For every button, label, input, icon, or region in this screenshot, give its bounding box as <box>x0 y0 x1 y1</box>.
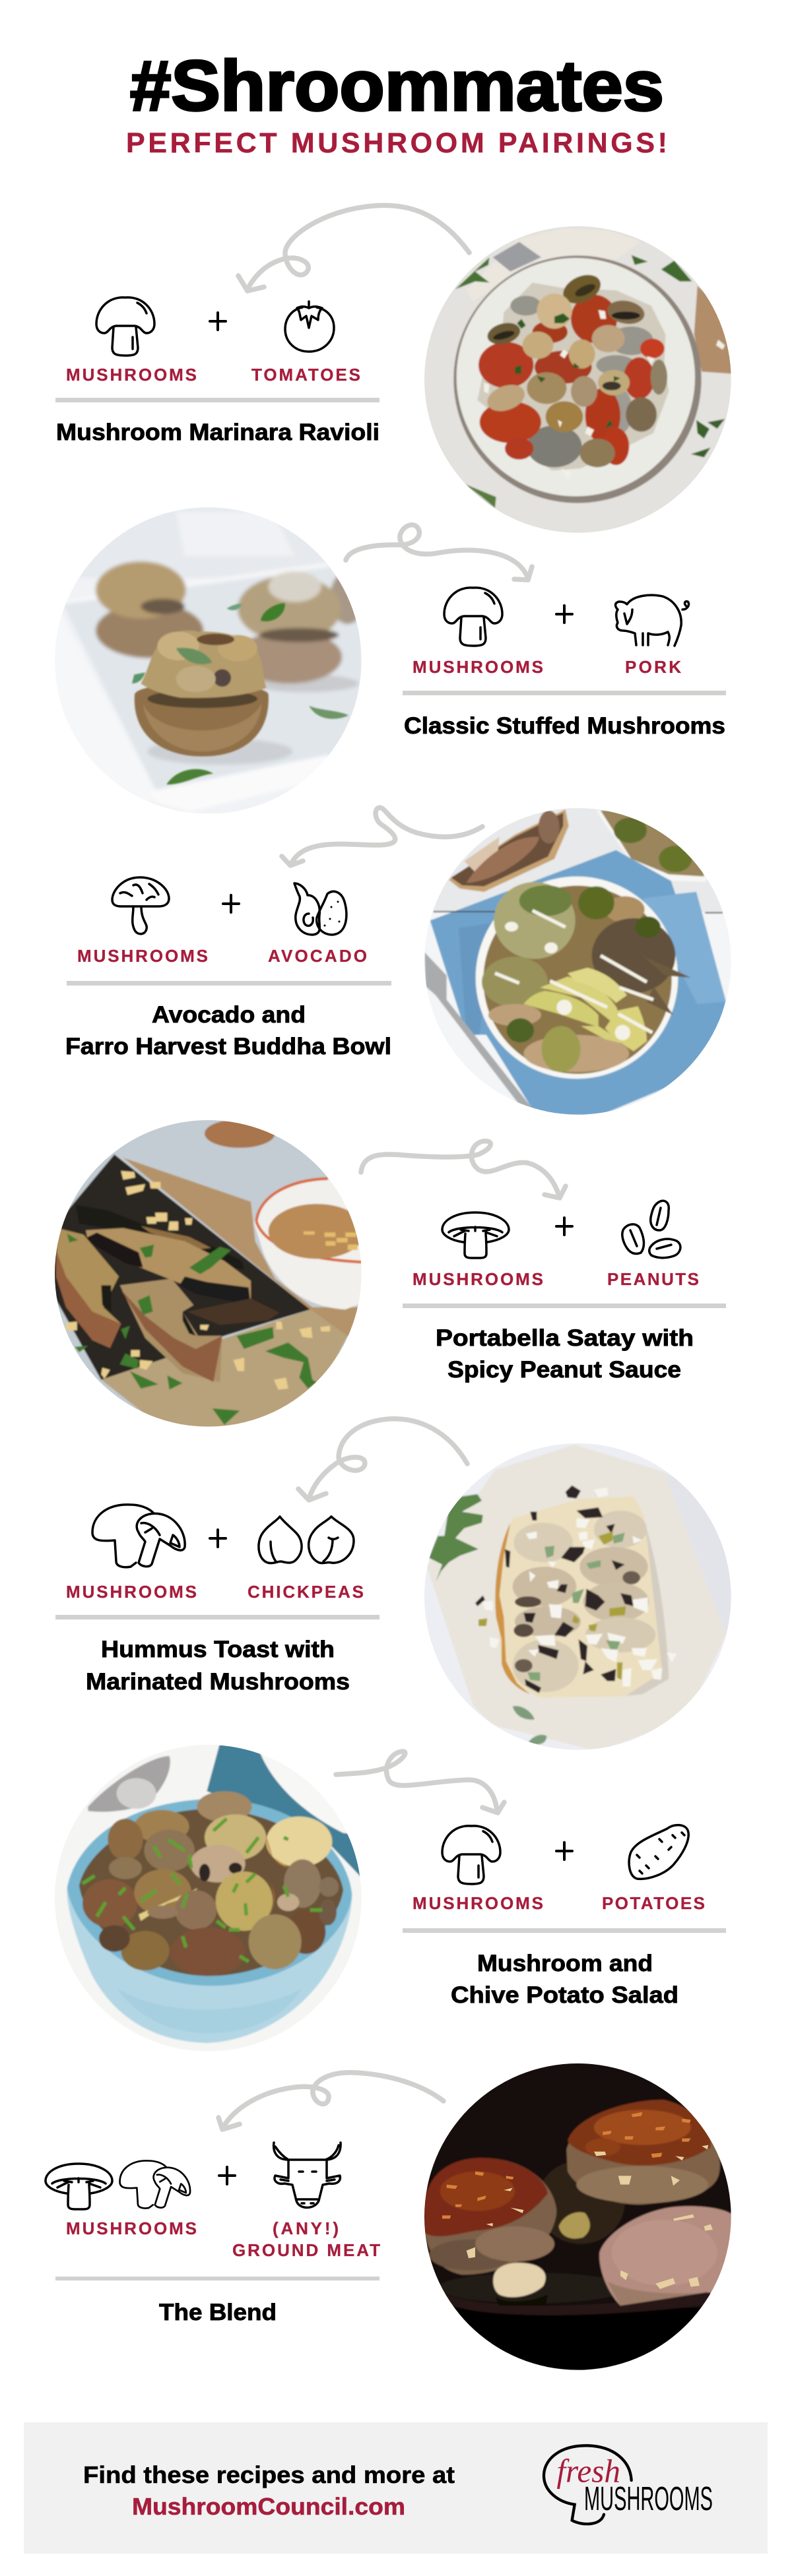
footer text <box>83 2461 455 2520</box>
pairing: mushrooms + potatoes <box>403 1825 726 2008</box>
plus sign <box>223 895 239 912</box>
label: any ground meat: (ANY!) <box>273 2218 339 2238</box>
recipe name: Marinated Mushrooms <box>86 1669 350 1695</box>
label: tomatoes: TOMATOES <box>251 365 360 385</box>
photo: mushroom marinara ravioli <box>422 224 733 534</box>
icon: peanuts <box>622 1201 680 1258</box>
pairing: mushrooms + peanuts <box>403 1201 726 1383</box>
label: mushrooms: MUSHROOMS <box>412 1269 543 1289</box>
photo: the blend burgers <box>422 2061 733 2372</box>
arrow: satay to ingredients <box>361 1141 566 1198</box>
footer text: MushroomCouncil.com <box>132 2493 405 2520</box>
plus sign <box>210 1530 226 1547</box>
arrow: potato salad to ingredients <box>336 1751 504 1813</box>
title: #Shroommates <box>130 46 664 125</box>
arrow: ravioli to ingredients <box>238 205 469 291</box>
recipe name <box>86 1637 350 1695</box>
icon: button mushroom <box>442 1826 500 1884</box>
footer panel <box>24 2422 768 2554</box>
recipe name <box>451 1951 678 2008</box>
pairing: mushrooms + chickpeas <box>55 1505 380 1695</box>
recipe name: Mushroom Marinara Ravioli <box>56 420 380 445</box>
label: mushrooms: MUSHROOMS <box>412 1893 543 1913</box>
icon: potato <box>629 1825 688 1879</box>
recipe name <box>65 1002 391 1059</box>
recipe name: Classic Stuffed Mushrooms <box>404 713 725 739</box>
recipe name: Hummus Toast with <box>101 1637 335 1662</box>
label: mushrooms: MUSHROOMS <box>66 1582 197 1602</box>
recipe name: Spicy Peanut Sauce <box>447 1357 681 1383</box>
icon: double mushrooms <box>120 2160 190 2209</box>
label: mushrooms: MUSHROOMS <box>66 2218 197 2238</box>
photo: mushroom and chive potato salad <box>53 1743 363 2053</box>
icon: double mushrooms <box>92 1505 185 1567</box>
logo: fresh mushrooms <box>544 2445 713 2524</box>
icon: avocado <box>294 883 346 935</box>
icon: tomato <box>285 301 334 352</box>
recipe name: The Blend <box>159 2300 277 2325</box>
label: avocado: AVOCADO <box>268 946 367 966</box>
subtitle: PERFECT MUSHROOM PAIRINGS! <box>126 127 667 159</box>
pairing: mushrooms + tomatoes <box>55 298 380 445</box>
label: mushrooms: MUSHROOMS <box>77 946 208 966</box>
icon: button mushroom <box>96 298 154 356</box>
icon: chickpeas <box>259 1517 354 1563</box>
arrow: buddha bowl to ingredients <box>282 807 482 865</box>
arrow: the blend to ingredients <box>218 2073 444 2129</box>
label: potatoes: POTATOES <box>602 1893 705 1913</box>
icon: portabella mushroom <box>442 1212 509 1258</box>
label: pork: PORK <box>625 657 681 677</box>
label: peanuts: PEANUTS <box>607 1269 699 1289</box>
pairing: mushrooms + ground meat <box>46 2143 380 2325</box>
icon: button mushroom <box>444 588 502 646</box>
icon: shiitake mushroom <box>112 877 169 934</box>
photo: avocado and farro buddha bowl <box>422 806 733 1116</box>
plus sign <box>219 2167 235 2184</box>
logo: fresh mushrooms: fresh <box>556 2453 620 2490</box>
pairing: mushrooms + pork <box>403 588 726 739</box>
icon: pig <box>615 595 689 646</box>
label: mushrooms: MUSHROOMS <box>66 365 197 385</box>
label: mushrooms: MUSHROOMS <box>412 657 543 677</box>
pairing: mushrooms + avocado <box>65 877 391 1059</box>
recipe name: Farro Harvest Buddha Bowl <box>65 1034 391 1059</box>
label: any ground meat: GROUND MEAT <box>232 2240 380 2260</box>
icon: portabella mushroom <box>46 2164 112 2209</box>
arrow: stuffed mushrooms to ingredients <box>346 525 532 580</box>
plus sign <box>556 606 572 623</box>
label: any ground meat <box>232 2218 380 2260</box>
plus sign <box>556 1218 572 1235</box>
plus sign <box>210 313 226 330</box>
recipe name: Portabella Satay with <box>436 1325 694 1351</box>
plus sign <box>556 1842 572 1860</box>
photo: portabella satay <box>53 1118 365 1428</box>
icon: cow <box>274 2143 341 2207</box>
label: chickpeas: CHICKPEAS <box>248 1582 364 1602</box>
photo: hummus toast <box>422 1441 733 1751</box>
footer text: Find these recipes and more at <box>83 2461 455 2488</box>
recipe name <box>436 1325 694 1383</box>
arrow: hummus toast to ingredients <box>298 1419 467 1500</box>
recipe name: Mushroom and <box>477 1951 653 1976</box>
photo: classic stuffed mushrooms <box>53 505 365 815</box>
recipe name: Chive Potato Salad <box>451 1982 678 2008</box>
recipe name: Avocado and <box>152 1002 306 1028</box>
